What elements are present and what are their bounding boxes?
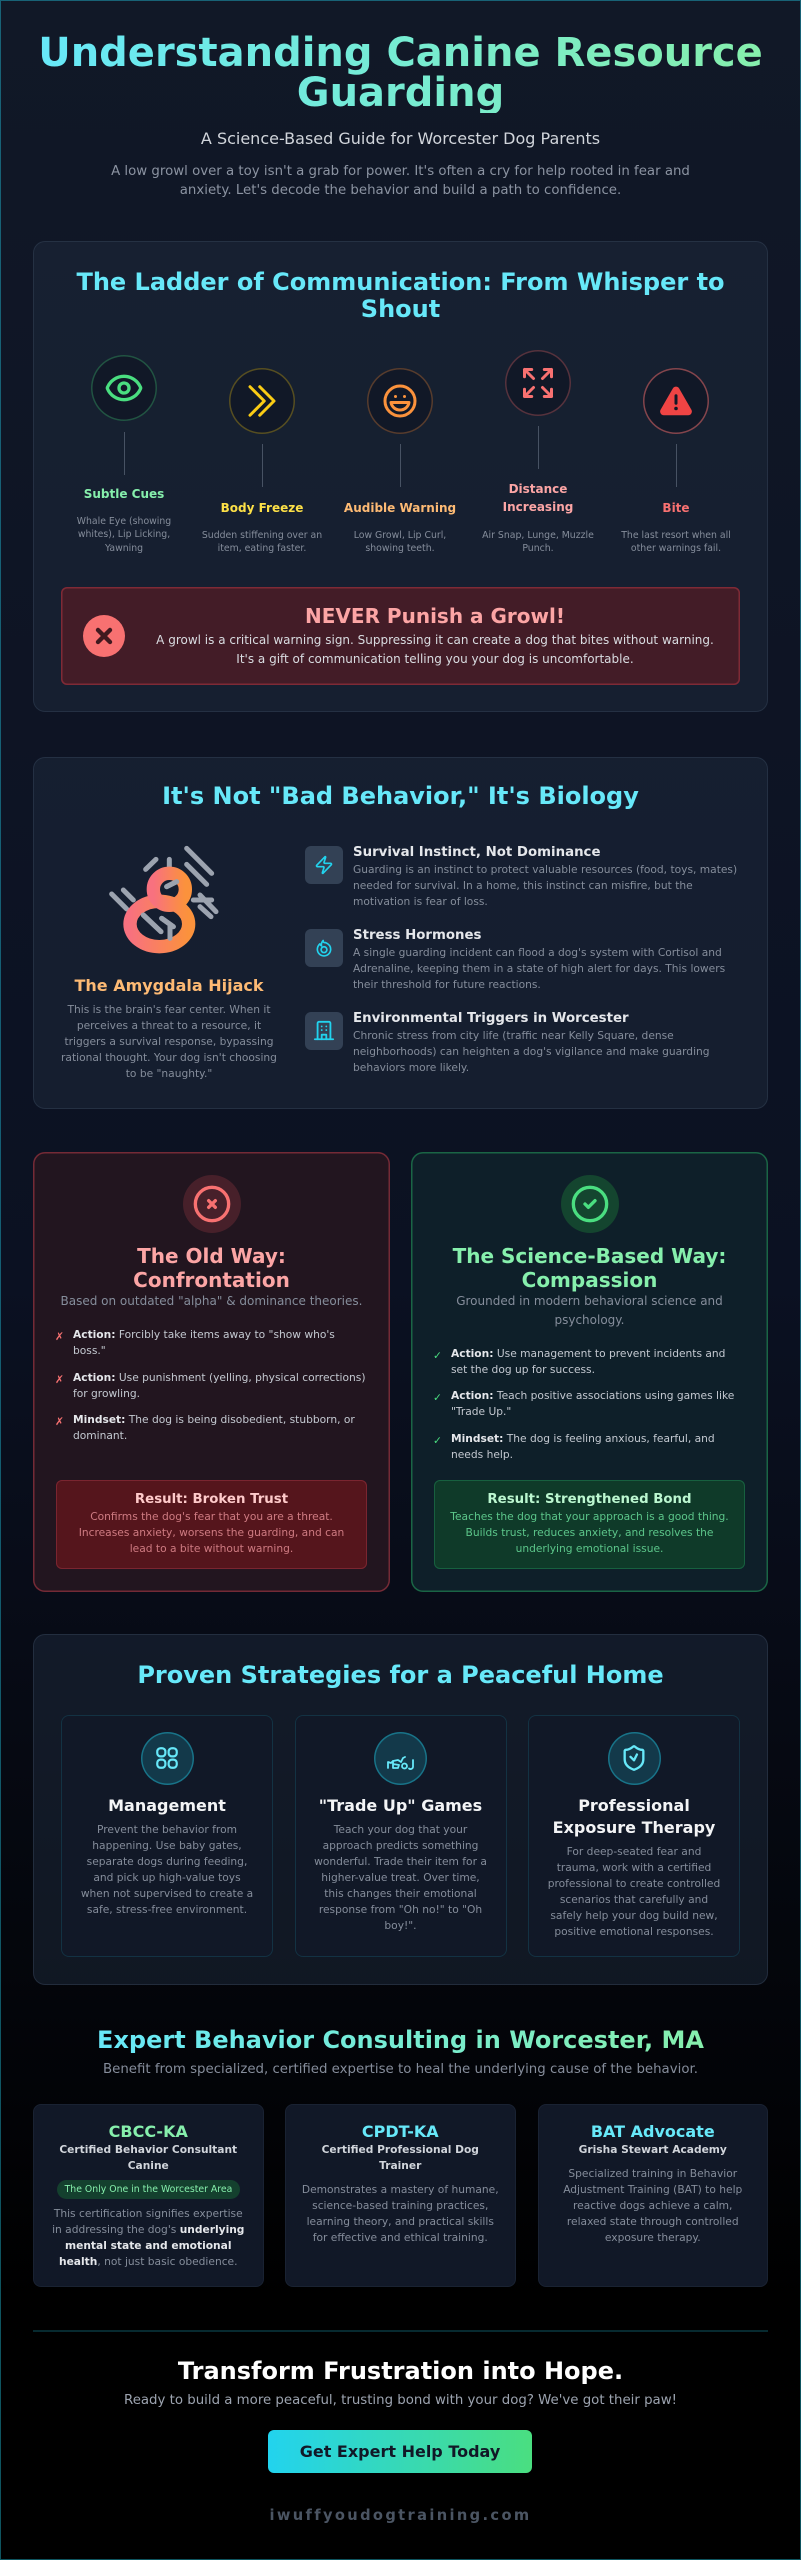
heading: Proven Strategies for a Peaceful Home (137, 1660, 664, 1688)
credential card: CBCC-KA (33, 2104, 264, 2287)
item text (353, 946, 725, 991)
description: Specialized training in Behavior (568, 2167, 737, 2180)
full title: Grisha Stewart Academy (579, 2143, 727, 2156)
ladder step: audible warning (344, 368, 456, 554)
card text: happening. Use baby gates, (92, 1839, 242, 1852)
mark: ✓ (433, 1391, 442, 1404)
result text: Teaches the dog that your approach is a good thing. (450, 1510, 729, 1523)
result text (434, 1509, 745, 1557)
label: Bite (662, 501, 690, 515)
card text: boy!". (384, 1919, 417, 1932)
label: Audible Warning (344, 501, 456, 515)
description (482, 530, 594, 554)
icon: x circle (83, 615, 125, 657)
heading (76, 268, 725, 323)
icon: building (305, 1012, 343, 1050)
description (33, 2206, 264, 2270)
description: Air Snap, Lunge, Muzzle (482, 530, 594, 540)
text: Action: Use punishment (yelling, physical corrections) (73, 1371, 365, 1384)
heading: Transform Frustration into Hope. (178, 2357, 623, 2385)
result title: Result: Strengthened Bond (487, 1492, 692, 1507)
card text: safe, stress-free environment. (87, 1903, 247, 1916)
description: exposure therapy. (605, 2231, 701, 2244)
text: Mindset: The dog is being disobedient, stubborn, or (73, 1413, 355, 1426)
heading: The Science-Based Way: (453, 1244, 726, 1268)
icon: grid (140, 1732, 194, 1784)
card text: positive emotional responses. (554, 1925, 714, 1938)
text: Action: Use management to prevent incidents and (451, 1347, 725, 1360)
item text: A single guarding incident can flood a dog's system with Cortisol and (353, 946, 722, 959)
description: This certification signifies expertise (54, 2207, 243, 2220)
heading: Expert Behavior Consulting in Worcester, MA (97, 2026, 704, 2054)
icon: expand arrows (505, 350, 571, 416)
panel: biology (33, 757, 768, 1109)
icon: flame (305, 929, 343, 967)
mark: ✗ (55, 1415, 64, 1428)
callout text: A growl is a critical warning sign. Suppressing it can create a dog that bites without warning. (156, 632, 714, 646)
description: showing teeth. (365, 543, 435, 554)
icon: shield check (608, 1732, 660, 1784)
label: Body Freeze (221, 501, 303, 515)
text: needs help. (451, 1448, 513, 1461)
text (451, 1432, 715, 1461)
amygdala description: to be "naughty." (126, 1067, 212, 1080)
mark: ✓ (433, 1349, 442, 1362)
icon: lightning (305, 846, 343, 884)
list item (433, 1389, 734, 1418)
description: for effective and ethical training. (313, 2231, 488, 2244)
card text (528, 1844, 740, 1940)
item text (353, 863, 737, 908)
list item (55, 1328, 335, 1357)
callout heading: NEVER Punish a Growl! (305, 604, 565, 628)
text: boss." (73, 1344, 106, 1357)
card text (294, 1822, 506, 1934)
card text: For deep-seated fear and (567, 1845, 701, 1858)
icon: x circle (182, 1175, 240, 1233)
text: "Trade Up." (451, 1405, 511, 1418)
description: Demonstrates a mastery of humane, (302, 2183, 499, 2196)
card title: Professional (578, 1796, 690, 1815)
heading: Shout (361, 295, 440, 323)
item: environmental triggers (305, 1011, 710, 1074)
description: The last resort when all (621, 530, 731, 540)
full title (285, 2142, 516, 2174)
strategy card: trade up (294, 1715, 506, 1957)
description: relaxed state through controlled (567, 2215, 739, 2228)
amygdala description: This is the brain's fear center. When it (67, 1003, 270, 1016)
title: Understanding Canine Resource (38, 30, 763, 76)
icon: growling face (367, 368, 433, 434)
description (538, 2166, 768, 2246)
card text: Teach your dog that your (334, 1823, 467, 1836)
item text (353, 1029, 710, 1074)
item: survival instinct (305, 845, 737, 908)
name: CPDT-KA (362, 2122, 439, 2141)
name: BAT Advocate (591, 2122, 715, 2141)
ladder step: body freeze (202, 368, 322, 554)
intro text (111, 164, 690, 198)
intro text: anxiety. Let's decode the behavior and build a path to confidence. (180, 182, 621, 198)
icon: check circle (560, 1175, 618, 1233)
description: science-based training practices, (312, 2199, 488, 2212)
text (73, 1328, 335, 1357)
item text: Guarding is an instinct to protect valuable resources (food, toys, mates) (353, 863, 737, 876)
title (38, 30, 763, 116)
icon: brain (109, 846, 218, 954)
result text: lead to a bite without warning. (130, 1542, 293, 1555)
section heading: expert consulting (33, 2024, 768, 2080)
amygdala description (61, 1003, 277, 1080)
label: Increasing (503, 500, 573, 514)
full title (33, 2142, 264, 2174)
card text: approach predicts something (323, 1839, 478, 1852)
label: Subtle Cues (84, 487, 164, 501)
subheading (456, 1294, 723, 1326)
subheading: psychology. (554, 1312, 624, 1326)
card text: wonderful. Trade their item for a (314, 1855, 487, 1868)
amygdala description: rational thought. Your dog isn't choosing (61, 1051, 277, 1064)
text: dominant. (73, 1429, 127, 1442)
card text: when not supervised to create a (81, 1887, 253, 1900)
panel: proven strategies (33, 1634, 768, 1985)
mark: ✗ (55, 1330, 64, 1343)
subheading: Benefit from specialized, certified expertise to heal the underlying cause of the behavior. (103, 2062, 698, 2076)
result text: underlying emotional issue. (516, 1542, 663, 1555)
website: iwuffyoudogtraining.com (269, 2507, 532, 2524)
card text: this changes their emotional (324, 1887, 477, 1900)
list item (55, 1413, 355, 1442)
text (451, 1347, 725, 1376)
ladder step: distance increasing (482, 350, 594, 554)
credential card: CPDT-KA (285, 2104, 516, 2287)
description (285, 2182, 516, 2246)
description: item, eating faster. (218, 543, 306, 554)
list item (433, 1347, 725, 1376)
result text: Builds trust, reduces anxiety, and resolves the (466, 1526, 713, 1539)
description: Whale Eye (showing (77, 516, 171, 527)
text: for growling. (73, 1387, 140, 1400)
list item (55, 1371, 365, 1400)
text (73, 1371, 365, 1400)
badge (57, 2180, 240, 2199)
description: Adjustment Training (BAT) to help (563, 2183, 742, 2196)
item title: Environmental Triggers in Worcester (353, 1011, 629, 1026)
icon: trade (374, 1732, 427, 1784)
panel: the science-based way (411, 1152, 768, 1592)
text: Action: Teach positive associations using games like (451, 1389, 734, 1402)
item text: Chronic stress from city life (traffic near Kelly Square, dense (353, 1029, 674, 1042)
title: Guarding (297, 70, 504, 116)
description: Punch. (522, 543, 554, 554)
subheading: Based on outdated "alpha" & dominance theories. (61, 1294, 362, 1308)
result text: Confirms the dog's fear that you are a threat. (90, 1510, 333, 1523)
description: reactive dogs achieve a calm, (573, 2199, 732, 2212)
icon: chevrons (229, 368, 295, 434)
heading: The Ladder of Communication: From Whisper to (76, 268, 725, 296)
credential card: BAT advocate (538, 2104, 768, 2287)
sub-heading: amygdala hijack: The Amygdala Hijack (74, 976, 264, 995)
item text: behaviors more likely. (353, 1061, 469, 1074)
description: whites), Lip Licking, (78, 529, 170, 540)
callout text (156, 632, 714, 666)
amygdala description: perceives a threat to a resource, it (77, 1019, 261, 1032)
label: Distance (509, 482, 567, 496)
description: Sudden stiffening over an (202, 530, 322, 540)
card text: safely help your dog build new, (550, 1909, 718, 1922)
description: mental state and emotional (65, 2239, 232, 2252)
list item (433, 1432, 715, 1461)
subheading: Ready to build a more peaceful, trusting bond with your dog? We've got their paw! (124, 2392, 677, 2408)
full title: Trainer (379, 2159, 421, 2172)
result text: Increases anxiety, worsens the guarding, and can (79, 1526, 344, 1539)
card text: and pick up high-value toys (93, 1871, 241, 1884)
icon: eye (91, 355, 157, 421)
text: set the dog up for success. (451, 1363, 595, 1376)
text (73, 1413, 355, 1442)
heading: Confrontation (133, 1268, 290, 1292)
description: other warnings fail. (631, 543, 721, 554)
item text: needed for survival. In a home, this instinct can misfire, but the (353, 879, 693, 892)
callout text: It's a gift of communication telling you your dog is uncomfortable. (236, 652, 634, 666)
card text: separate dogs during feeding, (87, 1855, 247, 1868)
full title: Canine (128, 2159, 169, 2172)
description: health, not just basic obedience. (59, 2255, 238, 2268)
description: Yawning (105, 543, 143, 554)
full title: Certified Behavior Consultant (59, 2143, 237, 2156)
item text: Adrenaline, keeping them in a state of high alert for days. This lowers (353, 962, 725, 975)
heading: It's Not "Bad Behavior," It's Biology (162, 782, 639, 810)
ladder step: subtle cues (77, 355, 171, 554)
card text (61, 1822, 273, 1918)
result text (79, 1510, 344, 1555)
ladder step: bite (621, 368, 731, 554)
card text: Prevent the behavior from (97, 1823, 237, 1836)
description (77, 516, 171, 554)
icon: warning triangle (643, 368, 709, 434)
card text: trauma, work with a certified (557, 1861, 711, 1874)
description: learning theory, and practical skills (307, 2215, 494, 2228)
card text: professional to create controlled (548, 1877, 720, 1890)
text: Mindset: The dog is feeling anxious, fearful, and (451, 1432, 715, 1445)
subtitle: A Science-Based Guide for Worcester Dog Parents (201, 129, 600, 148)
badge: The Only One in the Worcester Area (65, 2184, 232, 2195)
text: Action: Forcibly take items away to "show who's (73, 1328, 335, 1341)
item title: Stress Hormones (353, 928, 481, 943)
item: stress hormones (305, 928, 725, 991)
mark: ✓ (433, 1434, 442, 1447)
header (38, 30, 763, 198)
strategy card: exposure therapy (528, 1715, 740, 1957)
item text: motivation is fear of loss. (353, 895, 488, 908)
heading (452, 1244, 726, 1292)
card title (528, 1795, 740, 1838)
description (621, 530, 731, 554)
label (503, 482, 573, 514)
item text: neighborhoods) can heighten a dog's vigilance and make guarding (353, 1045, 710, 1058)
name: CBCC-KA (109, 2122, 188, 2141)
description (354, 530, 446, 554)
description: Low Growl, Lip Curl, (354, 530, 446, 540)
card title: Management (108, 1796, 226, 1815)
mark: ✗ (55, 1373, 64, 1386)
full title: Certified Professional Dog (322, 2143, 479, 2156)
result title: Result: Broken Trust (135, 1492, 288, 1507)
heading: Compassion (522, 1268, 657, 1292)
card text: response from "Oh no!" to "Oh (319, 1903, 482, 1916)
card title: "Trade Up" Games (319, 1796, 482, 1815)
result box (434, 1480, 745, 1569)
item title: Survival Instinct, Not Dominance (353, 845, 601, 860)
amygdala description: triggers a survival response, bypassing (64, 1035, 274, 1048)
subheading: Grounded in modern behavioral science and (456, 1294, 723, 1308)
callout: never punish a growl (61, 587, 740, 685)
card text: higher-value treat. Over time, (321, 1871, 480, 1884)
strategy card: management (61, 1715, 273, 1957)
button: Get Expert Help Today (300, 2442, 500, 2461)
panel: ladder of communication (33, 241, 768, 712)
footer call to action (33, 2355, 768, 2535)
description (202, 530, 322, 554)
heading (133, 1244, 290, 1292)
card text: scenarios that carefully and (560, 1893, 708, 1906)
card title: Exposure Therapy (553, 1818, 715, 1837)
description: in addressing the dog's underlying (52, 2223, 244, 2236)
panel: the old way (33, 1152, 390, 1592)
text (451, 1389, 734, 1418)
item text: their threshold for future reactions. (353, 978, 541, 991)
heading: The Old Way: (137, 1244, 286, 1268)
result box (56, 1480, 367, 1569)
button (268, 2430, 532, 2473)
intro text: A low growl over a toy isn't a grab for power. It's often a cry for help rooted in fear and (111, 164, 690, 178)
